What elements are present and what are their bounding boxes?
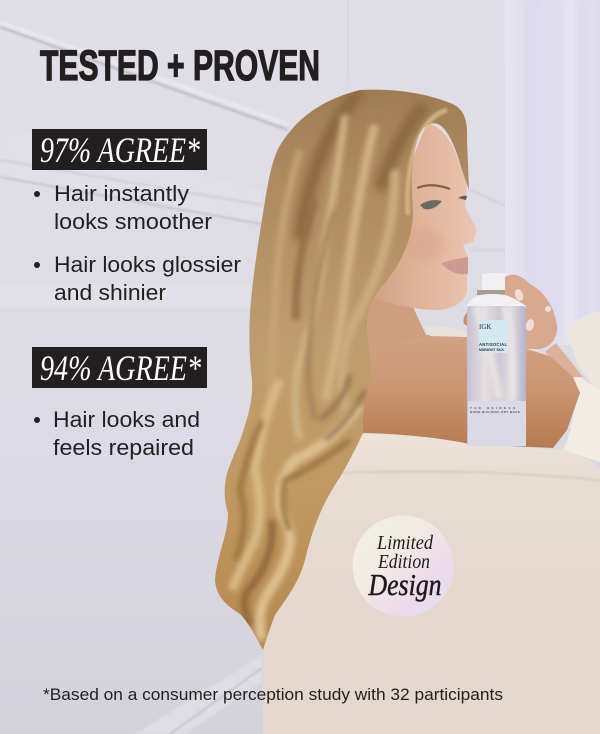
- bullets: 97%: looks smoother: [54, 209, 212, 234]
- title: TESTED + PROVEN: [40, 42, 320, 90]
- strap: [425, 326, 470, 337]
- curtain: [505, 0, 600, 345]
- bullets: 97%: and shinier: [54, 280, 166, 305]
- eyes and brows: [417, 185, 467, 209]
- product bottle: ANTISOCIAL: [479, 342, 507, 347]
- sticker: limited edition design: Edition: [377, 551, 430, 573]
- background sofa arm: [566, 312, 600, 395]
- bullets: 97%: [34, 181, 241, 305]
- forearm: [545, 343, 583, 377]
- badge: 94% agree: 94% AGREE*: [40, 348, 201, 388]
- chair: [263, 432, 600, 734]
- badge: 97% agree: 97% AGREE*: [40, 130, 200, 170]
- sticker: limited edition design: [352, 516, 454, 616]
- white top: [563, 373, 600, 462]
- sticker: limited edition design: Limited: [376, 532, 434, 554]
- face: [365, 123, 477, 310]
- sticker: limited edition design: Design: [368, 567, 442, 602]
- footnote: *Based on a consumer perception study with 32 participants: [43, 686, 503, 704]
- product bottle: BOND-BUILDING DRY MASK: [470, 410, 521, 414]
- lips: [441, 257, 468, 274]
- waves: [260, 405, 360, 640]
- bullets: 97%: Hair instantly: [54, 181, 189, 206]
- bottle label text: IGK: [479, 323, 491, 331]
- neck: [355, 285, 427, 350]
- hand: [505, 275, 557, 349]
- hair: [215, 90, 469, 650]
- bullets: 97%: Hair looks glossier: [54, 252, 241, 277]
- cheek blush: [405, 227, 445, 263]
- bullets: 94%: Hair looks and: [53, 407, 200, 432]
- back and arm: [360, 335, 580, 448]
- product bottle: [467, 273, 526, 446]
- product bottle: THE HEIRESS: [470, 406, 515, 410]
- model: [200, 80, 583, 660]
- finger behind bottle: [463, 312, 467, 326]
- product bottle: MIDNIGHT SILK: [479, 348, 505, 352]
- bullets: 94%: feels repaired: [53, 435, 194, 460]
- bullets: 94%: [34, 407, 200, 460]
